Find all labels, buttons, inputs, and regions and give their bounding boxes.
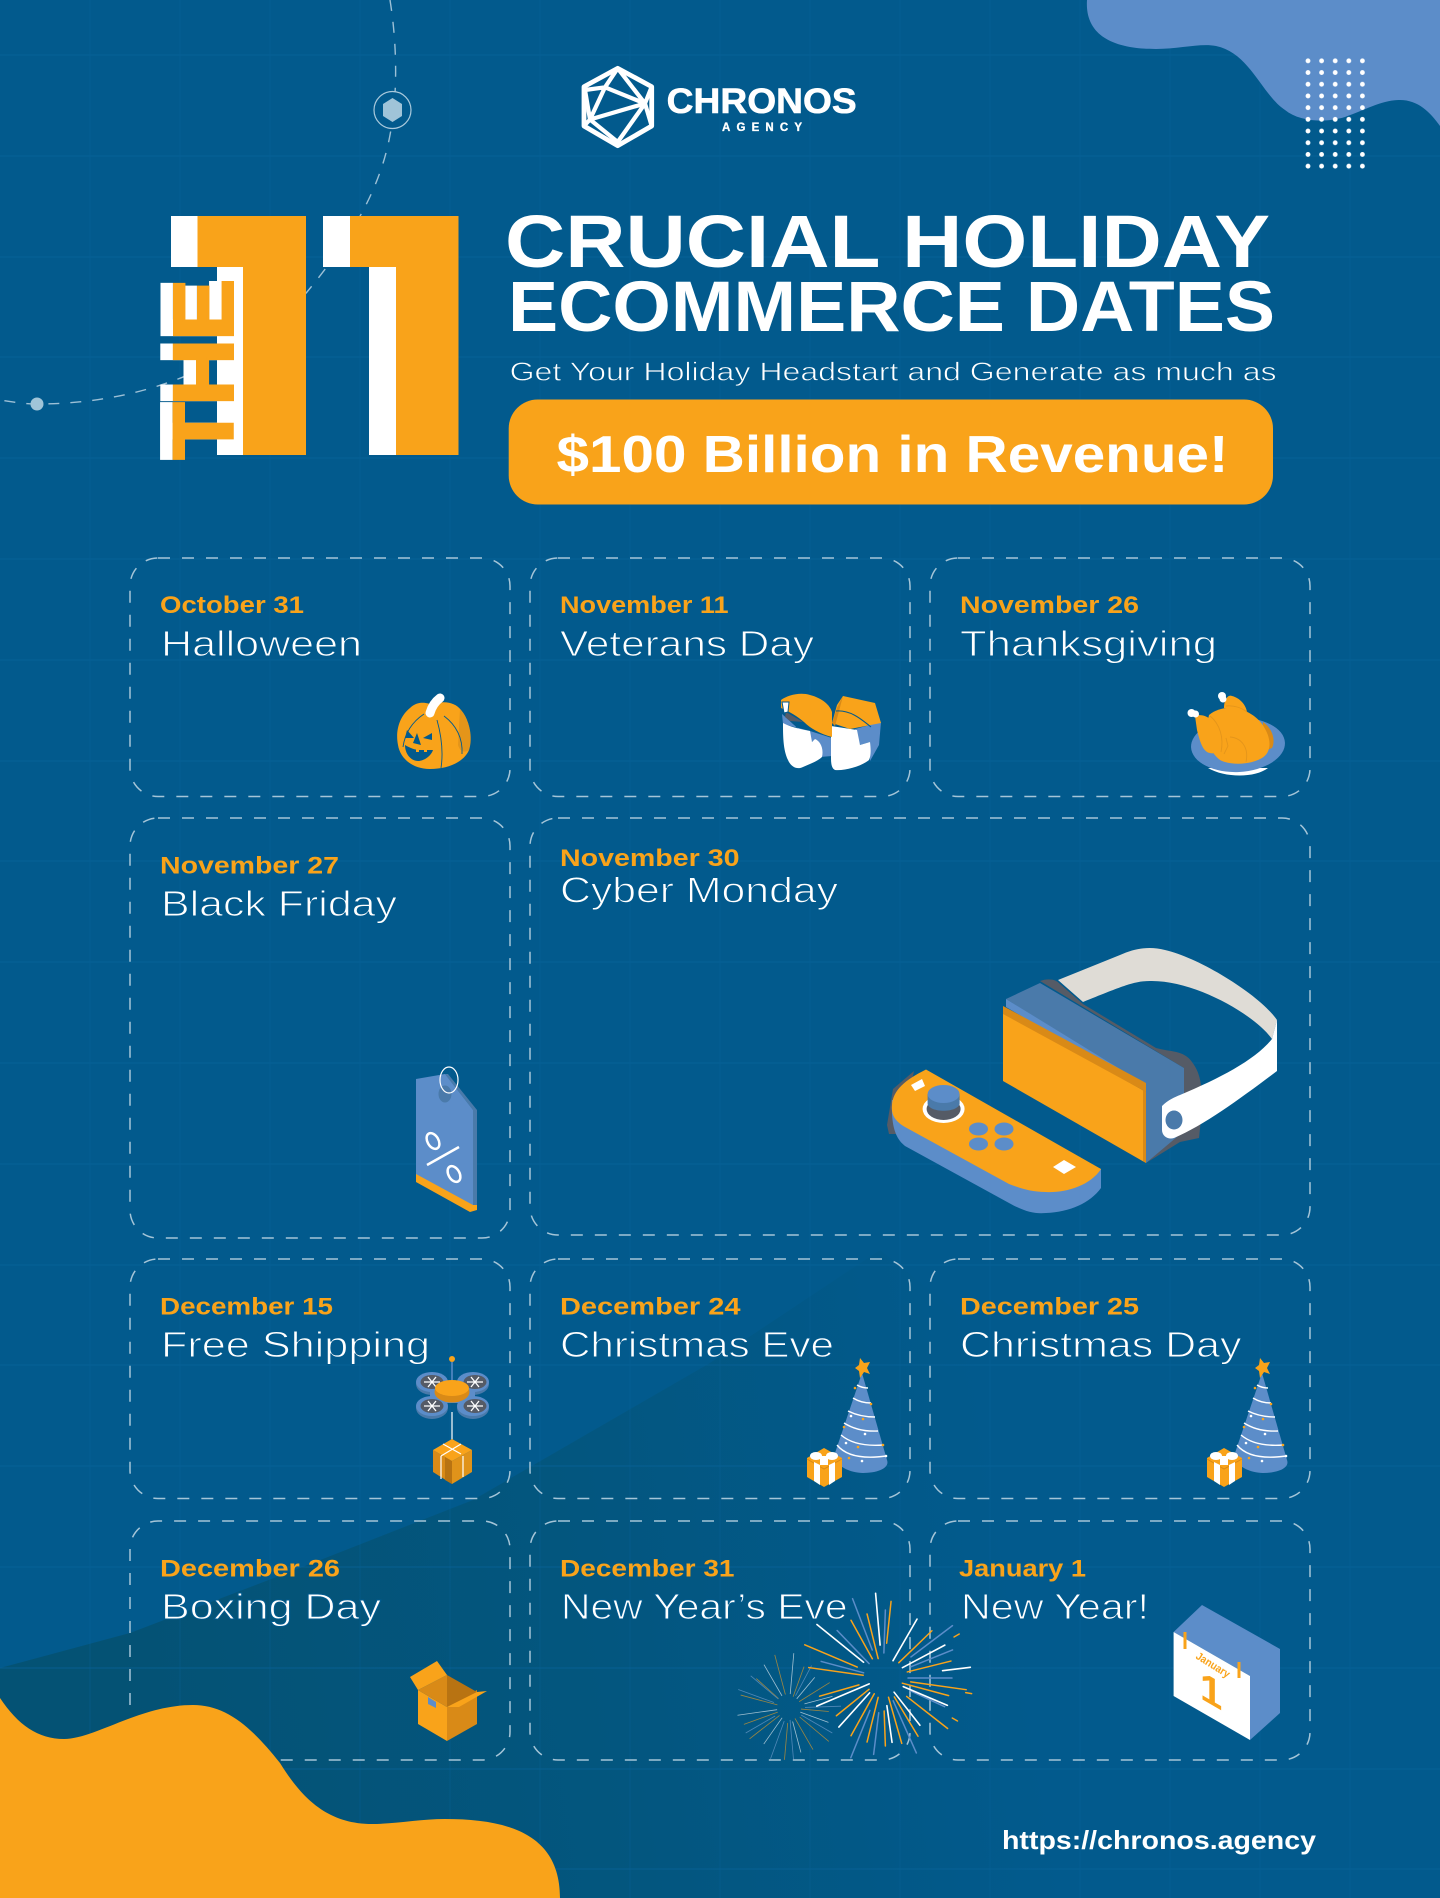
orbit line with nodes — [0, 0, 411, 410]
panel: Black Friday — [130, 818, 510, 1238]
icon: delivery drone with parcel — [416, 1356, 489, 1484]
bottom left orange blob — [0, 1698, 560, 1898]
holiday name: Christmas Eve — [560, 1324, 834, 1365]
logo icon — [584, 68, 652, 146]
big number 11 — [171, 216, 458, 455]
rotated word THE: THE — [156, 279, 251, 459]
title — [505, 200, 1275, 347]
logo — [584, 68, 857, 146]
dot grid decoration — [1301, 55, 1369, 172]
holiday name: Halloween — [161, 623, 362, 664]
date: October 31 — [160, 592, 304, 619]
icon: small firework — [738, 1653, 841, 1760]
icon: pumpkin — [397, 698, 471, 769]
date: December 25 — [960, 1294, 1139, 1321]
website url: https://chronos.agency — [1002, 1825, 1317, 1855]
panel: Halloween — [130, 558, 510, 796]
date: November 30 — [560, 845, 740, 872]
date: December 26 — [160, 1556, 340, 1583]
panel: New Year's Eve — [530, 1521, 910, 1760]
logo wordmark: CHRONOS — [667, 82, 857, 121]
panel: Boxing Day — [130, 1521, 510, 1760]
icon: game controller — [887, 1070, 1101, 1213]
date: December 31 — [560, 1556, 734, 1583]
icon: discount price tag — [416, 1067, 477, 1212]
icon: large firework — [805, 1593, 972, 1758]
holiday name: Christmas Day — [960, 1324, 1242, 1365]
rotated word THE: THE — [144, 279, 238, 459]
panel: Thanksgiving — [930, 558, 1310, 796]
title: CRUCIAL HOLIDAY — [505, 200, 1270, 283]
icon: calendar: January — [1193, 1650, 1233, 1681]
date: November 11 — [560, 592, 728, 619]
holiday name: Thanksgiving — [960, 623, 1217, 664]
subtitle: Get Your Holiday Headstart and Generate as much as — [510, 356, 1277, 386]
date: December 24 — [560, 1294, 741, 1321]
panel: Cyber Monday — [530, 818, 1310, 1235]
icon: military boots and caps — [781, 694, 881, 770]
icon: calendar — [1174, 1605, 1280, 1740]
logo sub-wordmark: AGENCY — [722, 122, 802, 134]
date: January 1 — [959, 1556, 1086, 1583]
panel: Christmas Day — [930, 1259, 1310, 1498]
icon: calendar: 1 — [1200, 1663, 1222, 1720]
holiday name: Veterans Day — [560, 623, 814, 664]
icon: VR headset — [1003, 948, 1277, 1163]
holiday name: New Year! — [961, 1586, 1149, 1627]
top right blue blob — [1087, 0, 1440, 126]
holiday name: Cyber Monday — [560, 870, 838, 910]
holiday name: Free Shipping — [161, 1324, 430, 1365]
panel: Christmas Eve — [530, 1259, 910, 1498]
title: ECOMMERCE DATES — [508, 268, 1275, 347]
revenue callout: $100 Billion in Revenue! — [556, 425, 1228, 483]
icon: open cardboard box — [410, 1661, 487, 1741]
date: November 27 — [160, 853, 339, 880]
date: December 15 — [160, 1294, 333, 1321]
holiday name: Boxing Day — [161, 1586, 381, 1627]
icon: christmas tree and gift — [807, 1358, 887, 1487]
date: November 26 — [960, 592, 1139, 619]
icon: christmas tree and gift — [1207, 1358, 1287, 1487]
holiday name: Black Friday — [161, 883, 397, 924]
panel: Free Shipping — [130, 1259, 510, 1498]
revenue callout — [509, 400, 1273, 504]
holiday name: New Year’s Eve — [561, 1586, 848, 1627]
panel: New Year — [930, 1521, 1310, 1760]
icon: roast turkey on plate — [1188, 692, 1286, 776]
dark diagonal background shape — [0, 1250, 1440, 1898]
panel: Veterans Day — [530, 558, 910, 796]
